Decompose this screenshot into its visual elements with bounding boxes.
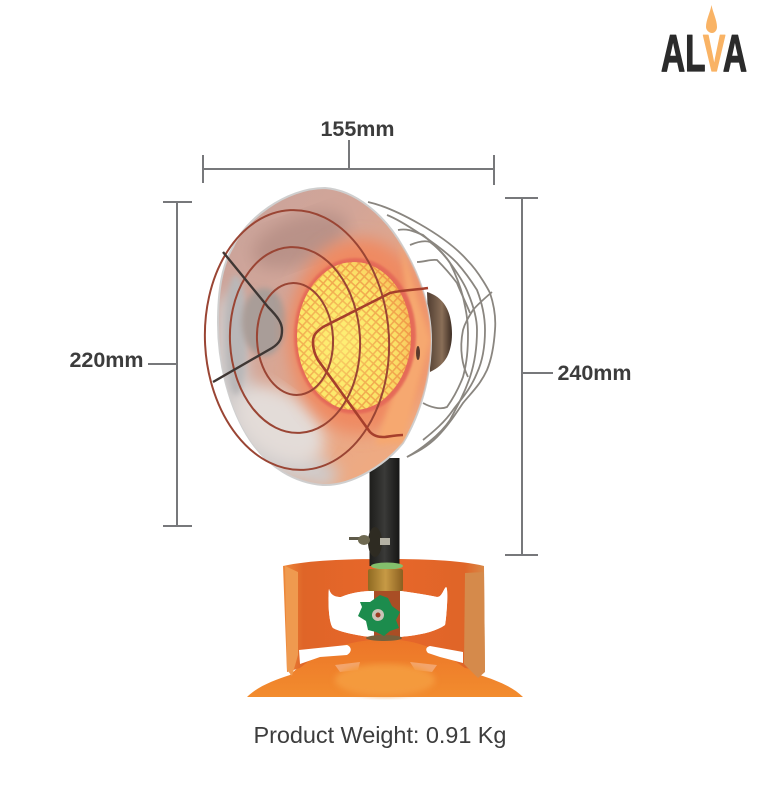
label: 220mm: 220mm [69,348,144,372]
label: 240mm: 240mm [557,361,632,385]
collar slots [299,645,463,664]
green valve knob [358,595,400,636]
logo: ALVA [661,5,747,83]
dimension: height 240mm [505,198,632,555]
dimension: height 220mm [69,202,192,526]
collar windows [328,587,447,637]
logo wordmark: ALVA [661,25,747,83]
front wire guard [198,205,428,475]
valve column [370,458,400,566]
brass connector [368,569,403,591]
gas cylinder [247,458,523,697]
label: 155mm: 155mm [320,117,395,141]
cylinder collar [283,559,485,672]
rear wire cage [368,202,495,457]
rear housing [427,292,452,372]
heater head [198,188,495,490]
wing nut [349,527,390,557]
dish shading [210,200,433,490]
burner mesh [297,262,411,410]
cylinder dome [247,637,523,697]
caption: product weight: Product Weight: 0.91 Kg [254,722,506,748]
green band [371,562,403,570]
logo flame [706,5,717,33]
valve stem [374,591,400,637]
dimension: width 155mm [203,117,494,185]
reflector dish [218,188,431,485]
burner ring [294,258,416,414]
cylinder wall highlights [285,566,298,676]
